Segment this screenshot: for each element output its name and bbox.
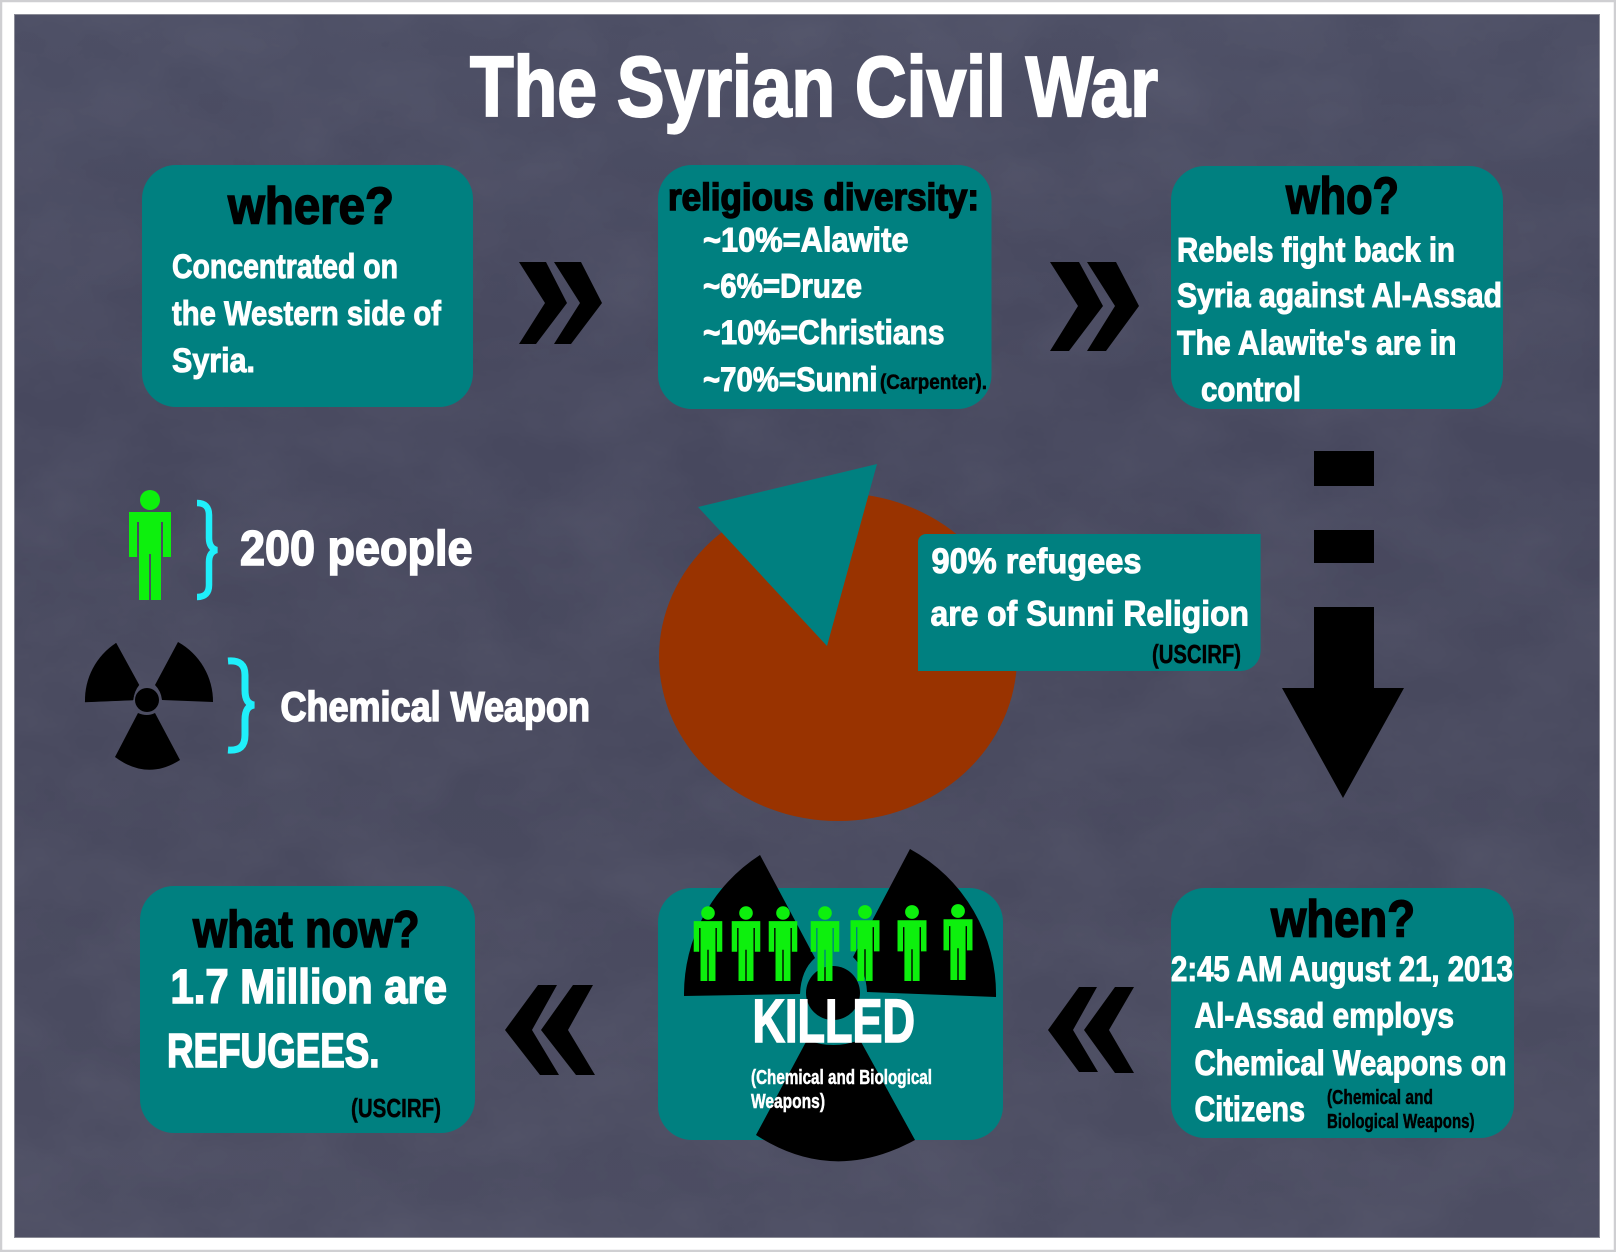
text: when body [1171,950,1513,1129]
label: Chemical Weapon: Chemical Weapon [280,683,590,730]
panel: when [1171,888,1514,1138]
citation: chemical and biological weapons [751,1067,932,1113]
text: religion percentages: ~10%=Alawite [703,222,908,260]
text: where body: Syria. [172,342,255,380]
text: when body: 2:45 AM August 21, 2013 [1171,950,1513,989]
panel: killed [658,849,1003,1161]
pie chart: refugee religion [659,464,1017,821]
arrow: chevrons when to killed [1048,987,1134,1073]
icons: row of seven people [694,904,972,981]
panel: religious diversity [658,165,992,409]
citation: chemical and biological weapons: (Chemical and Biological [751,1067,932,1089]
text: refugees count: REFUGEES. [167,1025,380,1078]
text: who body: Syria against Al-Assad [1177,277,1502,315]
icon: large radiation symbol [684,849,996,1161]
panel: who [1171,166,1503,409]
panel: where [142,165,473,407]
citation: chemical and biological weapons: Biological Weapons) [1327,1111,1474,1133]
text: refugees count [167,961,447,1078]
heading: religious diversity: religious diversity: [668,177,979,219]
heading: when: when? [1270,891,1415,949]
label: 200 people: 200 people [240,522,472,576]
text: religion percentages: ~6%=Druze [703,267,862,305]
callout: 90% refugees: are of Sunni Religion [930,594,1249,634]
text: religion percentages: ~10%=Christians [703,314,944,352]
text: religion percentages [703,222,944,399]
heading: what now: what now? [192,901,420,959]
arrow: chevrons religious diversity to who [1050,262,1139,351]
icon: radiation symbol [85,642,213,770]
text: refugees count: 1.7 Million are [170,961,447,1014]
arrow: dashed down arrow [1282,451,1404,798]
text: when body: Al-Assad employs [1194,996,1454,1036]
pie slice: exploded teal wedge [698,464,877,646]
citation: chemical and biological weapons: Weapons) [751,1091,825,1113]
icon: cyan brace [197,503,217,597]
arrow: chevrons where to religious diversity [519,262,602,344]
callout: 90% refugees: 90% refugees [932,542,1142,581]
text: where body [172,248,442,380]
text: who body [1177,232,1502,409]
arrow: chevrons killed to what now [505,985,595,1075]
panel: what now [140,886,475,1133]
icon: cyan brace [228,661,254,750]
text: where body: Concentrated on [172,248,398,286]
text: who body: Rebels fight back in [1177,232,1455,270]
pie slice: majority [659,493,1017,821]
text: religion percentages: ~70%=Sunni [703,361,878,399]
citation: chemical and biological weapons [1327,1087,1474,1133]
text: when body: Citizens [1194,1090,1305,1129]
citation: USCIRF: (USCIRF) [351,1093,441,1123]
text: where body: the Western side of [172,295,442,333]
text: when body: Chemical Weapons on [1194,1044,1506,1083]
text: who body: The Alawite's are in [1177,324,1456,362]
title: The Syrian Civil War [470,40,1158,135]
citation: chemical and biological weapons: (Chemical and [1327,1087,1433,1109]
label: KILLED: KILLED [752,987,915,1055]
heading: where: where? [227,178,394,236]
icon: green person [129,490,171,600]
legend: person equals 200 people [129,490,472,600]
citation: Carpenter: (Carpenter). [880,371,987,394]
callout: 90% refugees [918,534,1261,671]
text: who body: control [1201,371,1301,409]
citation: USCIRF: (USCIRF) [1152,639,1241,669]
legend: radiation equals chemical weapon [85,642,590,770]
heading: who: who? [1285,168,1399,226]
